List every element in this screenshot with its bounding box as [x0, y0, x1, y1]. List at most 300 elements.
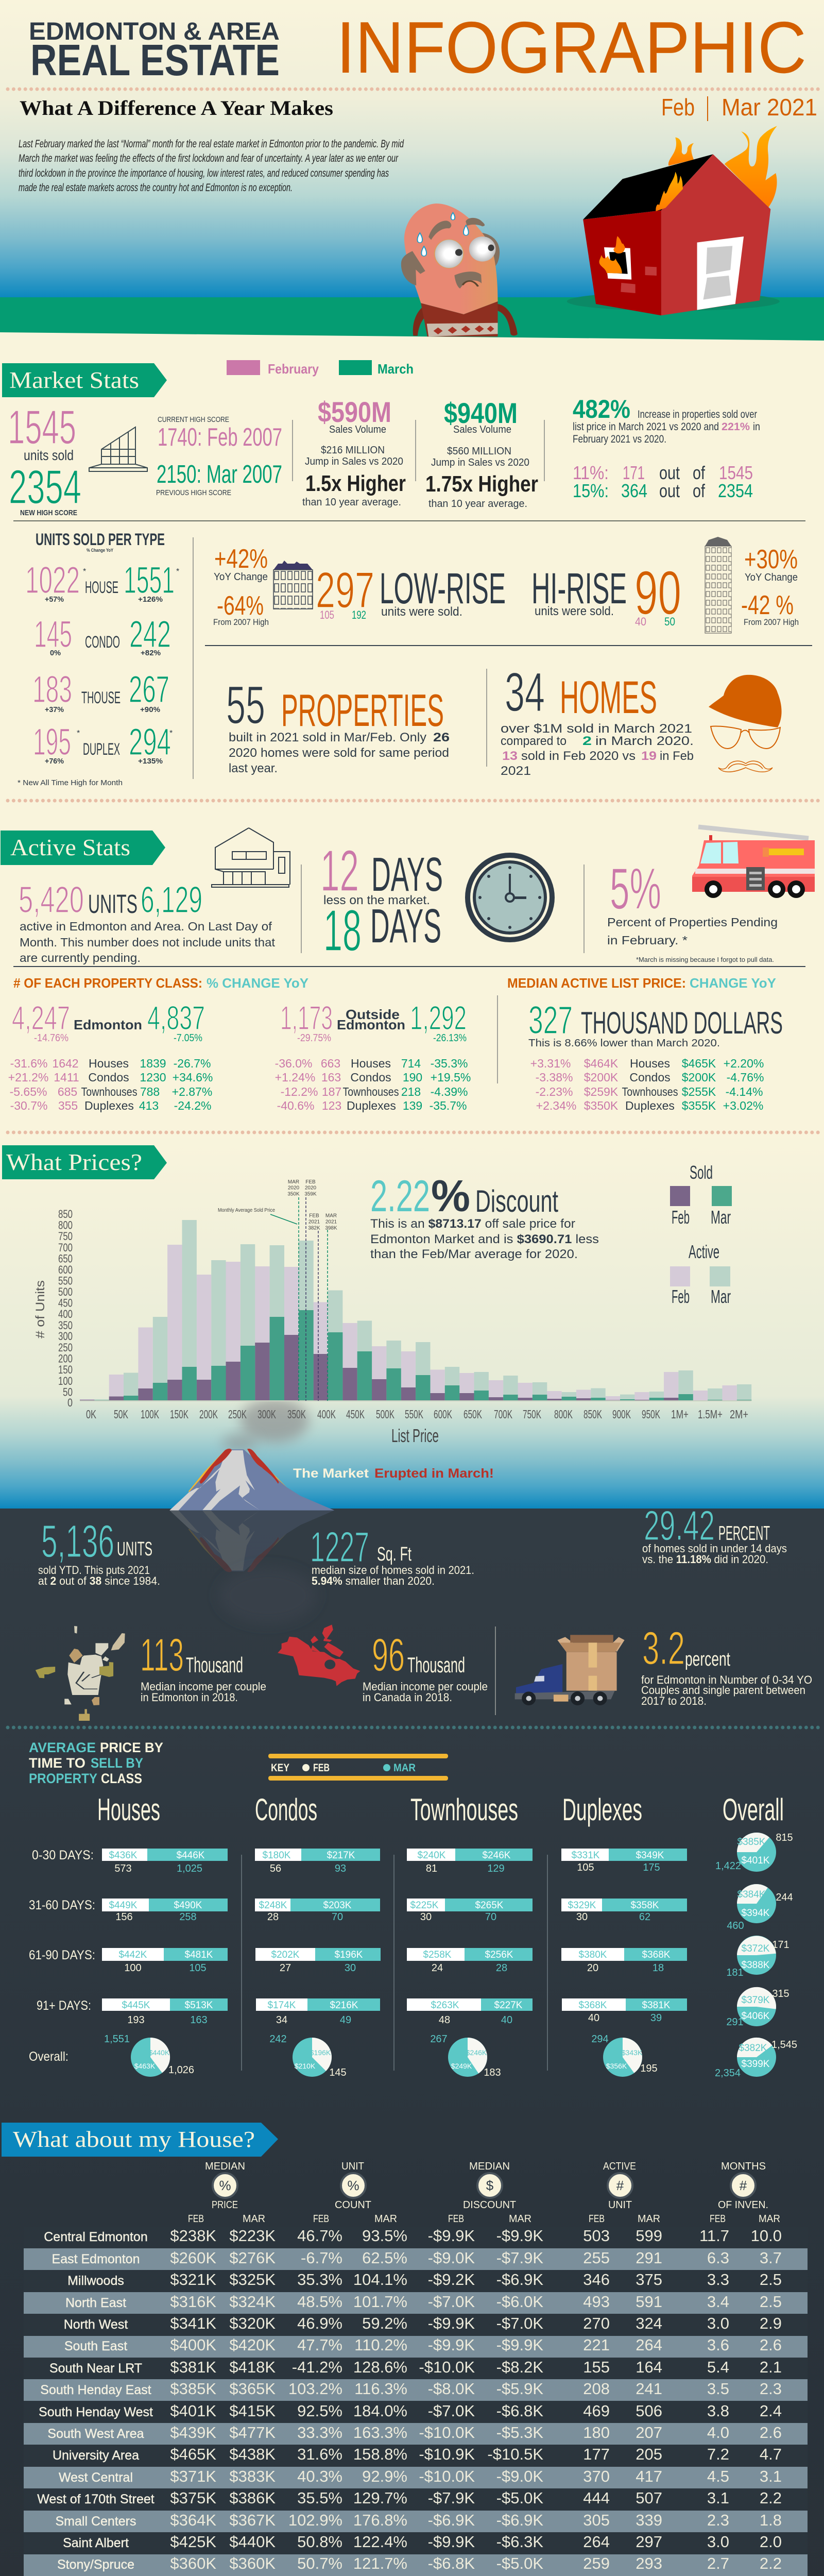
pies: overall by property class: 267: [430, 2033, 448, 2045]
row: Stony/Spruce: Stony/Spruce: [57, 2557, 134, 2572]
panel: low-rise: [213, 544, 506, 627]
heading: property class: % CHANGE YoY: [207, 975, 308, 991]
panel: townhouses price bars: $263K: [431, 2000, 459, 2011]
y axis title: # of Units: [33, 1280, 47, 1338]
row: Millwoods: 35.3%: [297, 2270, 342, 2289]
stat: percent sold under 14 days: of homes sold in under 14 days: [642, 1542, 787, 1555]
row: West Central: -$9.0K: [496, 2467, 543, 2485]
row: Small Centers: $367K: [229, 2511, 276, 2529]
panel: low-rise: From 2007 High: [213, 617, 269, 627]
table: Outside Edmonton property classes: -35.7%: [430, 1099, 467, 1112]
row: townhouse: [32, 669, 169, 714]
header icons: [213, 2173, 756, 2198]
panel: 34 homes: in Feb: [660, 749, 694, 763]
header icons: #: [740, 2178, 747, 2193]
table: Outside Edmonton property classes: -12.2%: [281, 1085, 318, 1098]
row: Millwoods: -$6.9K: [496, 2270, 543, 2289]
x axis labels: 750K: [523, 1408, 541, 1421]
table: Edmonton property classes: -31.6%: [10, 1057, 47, 1070]
x axis labels: 600K: [434, 1408, 452, 1421]
row: Central Edmonton: [44, 2227, 782, 2245]
row: Central Edmonton: 10.0: [751, 2227, 782, 2245]
table: Outside Edmonton property classes: -4.39%: [431, 1085, 468, 1098]
illustration: volcano: [169, 1449, 334, 1511]
row: South Henday West: $415K: [229, 2402, 276, 2420]
row: condo: 145: [34, 614, 72, 655]
row: condo: 0%: [50, 649, 61, 657]
x axis labels: [86, 1408, 748, 1421]
row: house: *: [176, 567, 179, 576]
pies: overall by time to sell: $399K: [742, 2059, 770, 2070]
panel: condos price bars: 56: [270, 1863, 281, 1874]
row: South West Area: 180: [583, 2424, 610, 2442]
panel: 55 properties: [226, 675, 450, 775]
table: areas: [37, 2227, 782, 2576]
heading: average price by time to sell: [29, 1740, 163, 1786]
pies: overall by time to sell: $384K: [737, 1889, 766, 1900]
table: Outside Edmonton property classes: Townhouses: [343, 1085, 399, 1098]
row: South Near LRT: 164: [636, 2358, 662, 2376]
table: median list price by class: [530, 1057, 764, 1112]
table: median list price by class: $350K: [584, 1099, 619, 1112]
pies: overall by property class: 145: [329, 2067, 347, 2078]
row: North East: -$6.0K: [496, 2293, 543, 2311]
row: Small Centers: 339: [636, 2511, 662, 2529]
row: Millwoods: -$9.2K: [428, 2270, 475, 2289]
panel: houses price bars: $442K: [119, 1950, 147, 1960]
row: South Near LRT: $381K: [170, 2358, 216, 2376]
panel: houses price bars: 100: [124, 1962, 142, 1974]
row: South Henday East: South Henday East: [40, 2383, 151, 2397]
heading: average price by time to sell: TIME TO: [29, 1755, 85, 1771]
row: South Henday West: 469: [583, 2402, 610, 2420]
stat: median list price: 327: [528, 998, 573, 1042]
table: median list price by class: +2.34%: [536, 1099, 576, 1112]
panel: townhouses price bars: 129: [487, 1863, 505, 1874]
row: East Edmonton: 6.3: [707, 2249, 729, 2267]
pies: overall by property class: $210K: [295, 2062, 316, 2070]
column headings: [97, 1792, 784, 1827]
pies: overall by time to sell: 244: [776, 1892, 793, 1903]
stat: discount: [370, 1172, 599, 1261]
x axis labels: 450K: [346, 1408, 365, 1421]
panel: townhouses price bars: $256K: [485, 1950, 513, 1960]
y axis labels: 0: [67, 1396, 73, 1409]
row: South East: [64, 2336, 782, 2354]
table: Edmonton property classes: [8, 1057, 213, 1112]
panel: 34 homes: 2: [582, 734, 592, 748]
row: Small Centers: 176.8%: [353, 2511, 407, 2529]
table header: UNIT: [341, 2161, 364, 2172]
stat: sold over list share: of: [693, 462, 706, 483]
row: North West: $320K: [229, 2314, 276, 2332]
y axis labels: 750: [58, 1230, 73, 1243]
average sold price markers: MAR: [325, 1213, 337, 1219]
table: median list price by class: -4.14%: [726, 1085, 763, 1098]
panel: duplexes price bars: $358K: [631, 1900, 659, 1911]
column headings: Townhouses: [410, 1792, 518, 1827]
x axis labels: 200K: [199, 1408, 218, 1421]
panel: townhouses price bars: $240K: [418, 1850, 446, 1861]
row: Central Edmonton: -$9.9K: [428, 2227, 475, 2245]
x axis labels: 150K: [170, 1408, 188, 1421]
panel: 34 homes: 13: [502, 749, 518, 763]
panel: 55 properties: 55: [226, 675, 265, 735]
stat: percent sold under 14 days: PERCENT: [718, 1522, 770, 1545]
row: duplex: 195: [33, 721, 71, 763]
date: [661, 94, 817, 121]
stat: over list price: [573, 395, 760, 445]
row: North East: 591: [636, 2293, 662, 2311]
row: East Edmonton: East Edmonton: [52, 2252, 140, 2266]
row: West Central: [59, 2467, 782, 2485]
panel: townhouses price bars: 40: [501, 2014, 512, 2026]
row: Millwoods: [67, 2270, 782, 2289]
section banner: Market Stats: [2, 363, 167, 397]
y axis labels: 650: [58, 1252, 73, 1265]
legend: sold and active: Mar: [711, 1207, 731, 1228]
table: median list price by class: $259K: [584, 1085, 619, 1098]
stat: over list price: 482%: [573, 395, 630, 423]
row: Saint Albert: $440K: [229, 2533, 276, 2551]
row: South Henday West: 2.4: [760, 2402, 782, 2420]
panel: 55 properties: built in 2021 sold in Mar/Feb. Only: [229, 731, 426, 744]
y axis labels: 850: [58, 1208, 73, 1221]
row: Saint Albert: Saint Albert: [63, 2536, 129, 2550]
legend: sold and active: Feb: [672, 1207, 690, 1228]
row: Saint Albert: 50.8%: [297, 2533, 342, 2551]
stat: percent pending: 5%: [610, 856, 661, 921]
stat: units sold: 1545: [8, 400, 76, 454]
stat: young couples percent: 3.2: [642, 1623, 685, 1674]
row: West of 170th Street: 2.2: [760, 2489, 782, 2507]
stat: units sold YTD: [38, 1515, 160, 1587]
row: Millwoods: 346: [583, 2270, 610, 2289]
stat: sold over list share: out: [659, 462, 680, 483]
pies: overall by time to sell: 2,354: [715, 2067, 741, 2079]
row: West Central: 370: [583, 2467, 610, 2485]
row: Saint Albert: 3.0: [707, 2533, 729, 2551]
row: condo: +82%: [141, 649, 161, 657]
pies: overall by time to sell: $385K: [737, 1837, 766, 1848]
stat: Outside Edmonton: -26.13%: [433, 1032, 467, 1044]
panel: townhouses price bars: 48: [439, 2014, 450, 2026]
row: townhouse: +37%: [45, 705, 64, 714]
stat: young couples percent: for Edmonton in Number of 0-34 YO: [641, 1673, 812, 1686]
row: West Central: West Central: [59, 2470, 133, 2485]
average sold price markers: 350K: [287, 1191, 300, 1197]
table: Edmonton property classes: -26.7%: [174, 1057, 211, 1070]
icon: building: [89, 427, 147, 471]
table: Edmonton property classes: 1839: [140, 1057, 166, 1070]
header icons: $: [486, 2178, 494, 2193]
table: median list price by class: $355K: [682, 1099, 716, 1112]
heading: average price by time to sell: AVERAGE: [29, 1740, 96, 1755]
stat: median size: Sq. Ft: [377, 1544, 411, 1565]
panel: 34 homes: compared to: [501, 734, 566, 748]
row: East Edmonton: -6.7%: [301, 2249, 342, 2267]
row: South West Area: -$5.3K: [496, 2424, 543, 2442]
stat: Edmonton median income: in Edmonton in 2018.: [141, 1691, 238, 1704]
row: Stony/Spruce: 50.7%: [297, 2554, 342, 2572]
legend: sold and active: Active: [689, 1241, 719, 1262]
row: South Henday East: $385K: [170, 2380, 216, 2398]
row: West Central: 3.1: [760, 2467, 782, 2485]
table: Edmonton property classes: Duplexes: [84, 1099, 134, 1112]
row: North West: 270: [583, 2314, 610, 2332]
row: Central Edmonton: -$9.9K: [496, 2227, 543, 2245]
stat: days on market: DAYS: [370, 899, 441, 953]
table: Edmonton property classes: 413: [139, 1099, 159, 1112]
stat: March sales volume: Jump in Sales vs 2020: [431, 457, 529, 468]
stat: sold over list share: out: [659, 480, 680, 501]
stat: high scores: PREVIOUS HIGH SCORE: [156, 488, 231, 497]
table header: MONTHS: [721, 2161, 766, 2172]
panel: duplexes price bars: 18: [653, 1962, 664, 1974]
row: South Near LRT: 155: [583, 2358, 610, 2376]
row: West of 170th Street: 3.1: [707, 2489, 729, 2507]
stat: young couples percent: percent: [685, 1649, 730, 1670]
row: house: [25, 560, 179, 604]
stat: sold over list share: 171: [623, 462, 645, 483]
stat: young couples percent: Couples and single parent between: [641, 1684, 805, 1697]
stat: March sales volume: 1.75x Higher: [425, 471, 538, 497]
panel: houses price bars: 193: [127, 2014, 145, 2026]
stat: Edmonton median income: Thousand: [186, 1653, 243, 1677]
callout: market erupted: Erupted in March!: [374, 1466, 494, 1481]
legend: February and March: [227, 360, 414, 377]
table: Edmonton property classes: 1642: [52, 1057, 79, 1070]
pies: overall by property class: $463K: [134, 2062, 156, 2070]
stat: over list price: February 2021 vs 2020.: [573, 433, 666, 445]
icon: hat, glasses and moustache: [709, 675, 782, 772]
row: University Area: 4.7: [760, 2445, 782, 2463]
panel: 34 homes: 2021: [501, 764, 531, 778]
stat: high scores: 1740: Feb 2007: [158, 423, 282, 451]
panel: duplexes price bars: $380K: [579, 1950, 607, 1960]
panel: condos price bars: [255, 1849, 381, 2026]
row: Millwoods: 104.1%: [353, 2270, 407, 2289]
row: South Henday West: -$6.8K: [496, 2402, 543, 2420]
legend: sold and active: Mar: [711, 1286, 731, 1307]
y axis labels: 100: [58, 1375, 73, 1387]
stat: over list price: 221%: [722, 421, 750, 433]
y axis labels: 550: [58, 1275, 73, 1287]
row: North West: -$9.9K: [428, 2314, 475, 2332]
stat: March sales volume: than 10 year average.: [428, 498, 527, 510]
row: North East: North East: [65, 2296, 126, 2310]
row labels: 91+ DAYS:: [37, 1998, 91, 2013]
row: South Near LRT: [49, 2358, 782, 2376]
table: Outside Edmonton property classes: [275, 1057, 471, 1112]
panel: hi-rise: 50: [664, 615, 675, 628]
panel: hi-rise: +30%: [744, 545, 798, 574]
row: North West: -$7.0K: [496, 2314, 543, 2332]
panel: low-rise: -64%: [217, 591, 264, 621]
stat: active units: 6,129: [141, 879, 202, 921]
row: West of 170th Street: $386K: [229, 2489, 276, 2507]
table header: DISCOUNT: [463, 2199, 516, 2211]
panel: duplexes price bars: $329K: [568, 1900, 596, 1911]
row: South West Area: $439K: [170, 2424, 216, 2442]
row: South West Area: -$10.0K: [419, 2424, 475, 2442]
header icons: #: [616, 2178, 624, 2193]
y axis labels: 150: [58, 1363, 73, 1376]
row: West of 170th Street: $375K: [170, 2489, 216, 2507]
row: South East: 2.6: [760, 2336, 782, 2354]
stat: percent pending: [607, 856, 778, 963]
stat: Outside Edmonton: 1,173: [280, 999, 333, 1037]
x axis labels: 350K: [287, 1408, 306, 1421]
row: North East: -$7.0K: [428, 2293, 475, 2311]
panel: low-rise: 105: [320, 608, 334, 621]
row: South Henday West: $401K: [170, 2402, 216, 2420]
panel: 34 homes: 19: [641, 749, 657, 763]
average sold price markers: FEB: [309, 1213, 319, 1219]
stat: median list price: This is 8.66% lower than March 2020.: [528, 1038, 720, 1049]
legend: sold and active: Feb: [672, 1286, 690, 1307]
y axis labels: [58, 1208, 73, 1409]
row: South West Area: South West Area: [47, 2427, 144, 2441]
row: University Area: -$10.5K: [487, 2445, 543, 2463]
row: South East: 110.2%: [354, 2336, 407, 2354]
row: West of 170th Street: 35.5%: [297, 2489, 342, 2507]
panel: houses price bars: 156: [115, 1911, 133, 1923]
panel: hi-rise: From 2007 High: [744, 617, 799, 627]
row: West Central: -$10.0K: [419, 2467, 475, 2485]
table: Edmonton property classes: 1411: [54, 1071, 79, 1084]
row: East Edmonton: 62.5%: [362, 2249, 407, 2267]
icon: hi-rise building: [705, 537, 731, 633]
pies: overall by time to sell: 815: [776, 1832, 793, 1843]
panel: low-rise: 192: [352, 608, 366, 621]
row: South Near LRT: South Near LRT: [49, 2361, 142, 2376]
x axis labels: 300K: [258, 1408, 276, 1421]
intro paragraph: made the real estate markets across the country hot and Edmonton is no exception.: [19, 182, 293, 194]
row: Stony/Spruce: 2.2: [760, 2554, 782, 2572]
row: West of 170th Street: 444: [583, 2489, 610, 2507]
row: Central Edmonton: 503: [583, 2227, 610, 2245]
month labels: FEB: [448, 2213, 464, 2225]
pies: overall by time to sell: 315: [772, 1988, 789, 1999]
stat: discount: Edmonton Market and is $3690.71 less: [370, 1232, 599, 1246]
table: median list price by class: $200K: [584, 1071, 619, 1084]
row: East Edmonton: 3.7: [760, 2249, 782, 2267]
heading: average price by time to sell: CLASS: [101, 1771, 142, 1786]
stat: Canada median income: Thousand: [407, 1653, 465, 1677]
stat: units sold: [8, 400, 81, 517]
row: townhouse: 267: [129, 669, 169, 710]
reflection: volcano in water: [169, 1511, 334, 1624]
table header: MEDIAN: [205, 2161, 245, 2172]
row: West of 170th Street: -$5.0K: [496, 2489, 543, 2507]
row: South West Area: 207: [636, 2424, 662, 2442]
table: median list price by class: +3.02%: [723, 1099, 763, 1112]
row: house: 1551: [124, 560, 175, 601]
intro paragraph: Last February marked the last “Normal” month for the real estate market in Edmonton prior to the pandemic. By mid: [19, 138, 404, 150]
stat: Edmonton: Edmonton: [74, 1017, 142, 1032]
row: Millwoods: $325K: [229, 2270, 276, 2289]
row: condo: CONDO: [85, 633, 120, 651]
panel: houses price bars: 1,025: [177, 1863, 202, 1874]
icon: Edmonton map: [36, 1626, 125, 1721]
row: South Henday East: -$5.9K: [496, 2380, 543, 2398]
row: duplex: 294: [129, 721, 171, 763]
stat: discount: than the Feb/Mar average for 2020.: [370, 1247, 578, 1261]
stat: sold over list share: 11%:: [573, 462, 609, 483]
stat: February sales volume: $590M: [318, 396, 391, 428]
panel: townhouses price bars: $227K: [494, 2000, 523, 2011]
row: North West: North West: [64, 2317, 128, 2332]
table: Outside Edmonton property classes: 163: [321, 1071, 341, 1084]
section banner: What about my House: What about my House?: [13, 2127, 255, 2152]
intro paragraph: [19, 138, 404, 194]
panel: condos price bars: $203K: [323, 1900, 352, 1911]
row: East Edmonton: [52, 2249, 782, 2267]
row: Stony/Spruce: $360K: [170, 2554, 216, 2572]
chart: units by list price: [33, 1179, 751, 1451]
panel: duplexes price bars: 30: [576, 1911, 588, 1923]
table: median list price by class: $255K: [682, 1085, 716, 1098]
pies: overall by time to sell: [715, 1832, 797, 2079]
panel: duplexes price bars: 175: [643, 1862, 660, 1873]
pies: overall by property class: $246K: [466, 2048, 487, 2057]
row: West Central: $383K: [229, 2467, 276, 2485]
callout: market erupted: The Market: [293, 1466, 369, 1481]
row: Millwoods: 375: [636, 2270, 662, 2289]
row labels: [29, 1848, 95, 2064]
table: Outside Edmonton property classes: 123: [322, 1099, 341, 1112]
row: South West Area: 163.3%: [353, 2424, 407, 2442]
panel: duplexes price bars: 39: [650, 2012, 662, 2024]
x axis labels: 0K: [86, 1408, 96, 1421]
row: South East: 47.7%: [297, 2336, 342, 2354]
icon: moving truck: [515, 1635, 625, 1705]
table header: ACTIVE: [603, 2161, 636, 2172]
panel: 34 homes: over $1M sold in March 2021: [501, 722, 692, 736]
table: Edmonton property classes: 355: [58, 1099, 78, 1112]
row: duplex: DUPLEX: [83, 740, 120, 758]
average sold price markers: 359K: [304, 1191, 317, 1197]
panel: low-rise: units were sold.: [381, 605, 462, 619]
x axis labels: 950K: [642, 1408, 660, 1421]
panel: hi-rise: [531, 537, 799, 633]
stat: percent pending: Percent of Properties Pending: [607, 916, 778, 929]
stat: February sales volume: [302, 396, 406, 508]
table: Outside Edmonton property classes: Houses: [351, 1057, 391, 1070]
panel: duplexes price bars: $349K: [636, 1850, 664, 1861]
month labels: MAR: [509, 2213, 531, 2225]
table header: OF INVEN.: [718, 2199, 768, 2211]
month labels: FEB: [313, 2213, 329, 2225]
x axis title: List Price: [391, 1425, 439, 1446]
stat: high scores: 2150: Mar 2007: [157, 461, 282, 488]
pies: overall by time to sell: $388K: [742, 1960, 770, 1971]
row: Central Edmonton: Central Edmonton: [44, 2230, 148, 2244]
heading: property class: # OF EACH PROPERTY CLASS:: [13, 975, 202, 991]
icon: modern house: [212, 828, 290, 887]
legend: key: KEY: [271, 1762, 289, 1774]
panel: townhouses price bars: 28: [496, 1962, 507, 1974]
row: North West: 324: [636, 2314, 662, 2332]
pies: overall by property class: 1,026: [168, 2064, 194, 2076]
stat: median size: [310, 1523, 474, 1587]
panel: 34 homes: [501, 661, 694, 778]
stat: February sales volume: 1.5x Higher: [305, 471, 406, 496]
pies: overall by time to sell: $401K: [742, 1855, 770, 1866]
table: median list price by class: +3.31%: [530, 1057, 571, 1070]
column headings: Condos: [255, 1792, 317, 1827]
